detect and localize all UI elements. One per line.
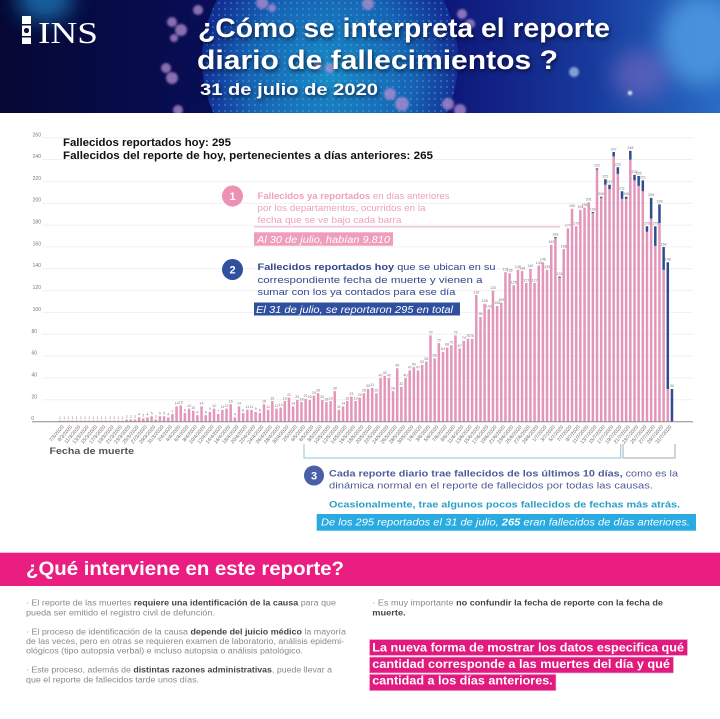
bars: fallecidos ya reportados (60, 156, 668, 422)
x axis date labels: 31/3/2020 (147, 424, 166, 445)
bar value labels: 40 (379, 373, 383, 377)
x axis date labels: 23/6/2020 (496, 424, 515, 445)
title: 31 de julio de 2020 (200, 80, 378, 99)
bar value labels: 116 (473, 290, 479, 294)
x axis date labels: 8/4/2020 (182, 424, 199, 443)
x axis date labels: 5/7/2020 (548, 424, 565, 443)
bar value labels: 136 (507, 268, 513, 272)
bar value labels: 23 (349, 392, 353, 396)
bar value labels: 6 (205, 410, 207, 414)
x axis date labels: 18/5/2020 (346, 424, 365, 445)
x axis date labels: 25/7/2020 (629, 424, 648, 445)
bar value labels: 177 (565, 224, 571, 228)
bar value labels: 205 (648, 193, 654, 197)
summary text (63, 137, 433, 162)
bar value labels: 222 (602, 175, 608, 179)
x axis date labels: 19/3/2020 (97, 424, 116, 445)
bar value labels: 1 (92, 416, 94, 420)
y axis labels: 0 (31, 416, 34, 422)
highlighted conclusion: La nueva forma de mostrar los datos especifica qué (372, 642, 684, 654)
bar value labels: 1 (109, 416, 111, 420)
bar value labels (59, 146, 674, 420)
title: diario de fallecimientos ? (197, 45, 558, 75)
bar value labels: 47 (408, 366, 412, 370)
left explanatory text: · El reporte de las muertes requiere una identificación de la causa para que (26, 599, 337, 608)
logo: INS (38, 15, 98, 50)
x axis date labels: 15/7/2020 (588, 424, 607, 445)
bar value labels: 12 (274, 404, 278, 408)
x axis date labels: 13/3/2020 (72, 424, 91, 445)
left explanatory text: · Este proceso, además de distintas razones administrativas , puede llevar a (26, 666, 333, 675)
x axis date labels: 7/3/2020 (48, 424, 66, 443)
x axis date labels: 27/3/2020 (130, 424, 149, 445)
bar value labels: 14 (341, 402, 345, 406)
bar value labels: 14 (200, 402, 204, 406)
bar value labels: 109 (498, 298, 504, 302)
bar value labels: 133 (557, 272, 563, 276)
bar value labels: 96 (478, 312, 482, 316)
bar value labels: 26 (316, 389, 320, 393)
bar value labels: 74 (462, 336, 466, 340)
bar value labels: 14 (291, 402, 295, 406)
bar value labels: 179 (652, 222, 658, 226)
x axis date labels: 18/4/2020 (221, 424, 241, 445)
bar value labels: 20 (320, 395, 324, 399)
x axis date labels: 29/3/2020 (138, 424, 157, 445)
y axis labels: 120 (33, 285, 41, 291)
bar value labels: 19 (329, 396, 333, 400)
bar value labels: 58 (433, 354, 437, 358)
bar value labels: 139 (544, 265, 550, 269)
bar value labels: 16 (262, 400, 266, 404)
callout 2: reportados hoy: Fallecidos reportados hoy que se ubican en su (258, 262, 496, 273)
bar value labels: 11 (250, 405, 253, 409)
bar value labels: 179 (644, 222, 650, 226)
highlighted conclusion (370, 640, 688, 691)
bar value labels: 11 (337, 405, 341, 409)
x axis date labels: 1/6/2020 (406, 424, 424, 443)
bar value labels: 31 (370, 383, 374, 387)
summary text: Fallecidos del reporte de hoy, pertenecientes a días anteriores: 265 (63, 150, 433, 162)
bar value labels: 7 (171, 409, 173, 413)
bar value labels: 146 (665, 258, 671, 262)
bracket: días recientes (623, 444, 675, 458)
bar value labels: 20 (295, 395, 299, 399)
bar value labels: 5 (151, 412, 153, 416)
x axis date labels: 26/5/2020 (380, 424, 399, 445)
bar value labels: 76 (466, 334, 470, 338)
bar value labels: 2 (155, 415, 157, 419)
x axis date labels: 28/5/2020 (388, 424, 407, 445)
bar value labels: 1 (71, 416, 73, 420)
bar value labels: 14 (237, 402, 241, 406)
callout 2: reportados hoy: correspondiente fecha de muerte y vienen a (258, 275, 483, 286)
x axis date labels: 11/7/2020 (571, 424, 590, 445)
bar value labels: 201 (586, 198, 592, 202)
bar value labels: 12 (225, 404, 229, 408)
x axis date labels: 28/4/2020 (263, 424, 282, 445)
bar value labels: 1 (121, 416, 123, 420)
x axis date labels: 9/6/2020 (440, 424, 457, 443)
y axis labels: 220 (33, 176, 41, 182)
callout 3: dinámica del reporte: De los 295 reportados el 31 de julio, 265 eran fallecidos de días anteriores. (321, 518, 690, 529)
bar value labels: 52 (420, 360, 424, 364)
bar value labels: 225 (636, 171, 642, 175)
x axis date labels: 6/5/2020 (298, 424, 315, 443)
bar value labels: 68 (445, 343, 449, 347)
bar value labels: 12 (187, 404, 191, 408)
x axis date labels: 20/4/2020 (230, 424, 249, 445)
bar value labels: 192 (590, 207, 596, 211)
bar value labels: 1 (80, 416, 82, 420)
bar value labels: 19 (283, 396, 287, 400)
bar value labels: 8 (259, 408, 261, 412)
bar value labels: 24 (312, 391, 316, 395)
x axis date labels: 21/3/2020 (105, 424, 124, 445)
bar value labels: 28 (333, 386, 337, 390)
bar value labels: 30 (366, 384, 370, 388)
bar value labels: 199 (656, 200, 662, 204)
bar value labels: 211 (619, 187, 625, 191)
bar value labels: 2 (130, 415, 132, 419)
bar value labels: 1 (76, 416, 78, 420)
x axis date labels: 10/5/2020 (313, 424, 332, 445)
title: ¿Cómo se interpreta el reporte (198, 13, 610, 43)
right explanatory text: · Es muy importante no confundir la fecha de reporte con la fecha de (372, 599, 664, 608)
x axis date labels: 13/7/2020 (579, 424, 599, 445)
x axis date labels: 14/4/2020 (205, 424, 224, 445)
callout 2: reportados hoy (222, 259, 496, 316)
bar value labels: 232 (594, 164, 600, 168)
bar value labels: 1 (84, 416, 86, 420)
bar value labels: 79 (453, 331, 457, 335)
x axis date labels: 19/7/2020 (604, 424, 624, 445)
highlighted conclusion: cantidad a los días anteriores. (372, 676, 553, 688)
bar value labels: 7 (217, 409, 219, 413)
x axis date labels: 30/4/2020 (271, 424, 290, 445)
bar value labels: 1 (88, 416, 90, 420)
bar value labels: 4 (146, 413, 148, 417)
bar value labels: 5 (163, 412, 165, 416)
bar value labels: 146 (540, 258, 546, 262)
x axis date labels: 20/5/2020 (355, 424, 374, 445)
bar value labels: 18 (324, 397, 328, 401)
bar value labels: 1 (67, 416, 69, 420)
callout 1: ya reportados: fecha que se ve bajo cada barra (258, 215, 402, 226)
bar value labels: 195 (569, 204, 575, 208)
bar value labels: 108 (482, 299, 488, 303)
x axis date labels: 17/3/2020 (88, 424, 107, 445)
bar value labels: 158 (561, 244, 567, 248)
x axis date labels: 4/4/2020 (165, 424, 182, 443)
x axis date labels: 29/6/2020 (521, 424, 540, 445)
x axis date labels: 13/6/2020 (455, 424, 474, 445)
x axis date labels: 7/7/2020 (556, 424, 574, 443)
y axis labels: 200 (33, 198, 41, 204)
left explanatory text (26, 599, 347, 684)
y axis labels: 40 (31, 372, 37, 378)
bar value labels: 47 (416, 366, 420, 370)
x axis date labels: 25/6/2020 (505, 424, 524, 445)
bar value labels: 160 (661, 242, 667, 246)
callout 3: dinámica del reporte: Ocasionalmente, trae algunos pocos fallecidos de fechas más atrás. (329, 499, 680, 510)
x axis date labels: 16/4/2020 (213, 424, 232, 445)
callout 1: ya reportados: Fallecidos ya reportados en días anteriores (258, 191, 450, 202)
bar value labels: 221 (640, 176, 646, 180)
bar value labels: 21 (304, 394, 308, 398)
bar value labels: 233 (615, 163, 621, 167)
bar value labels: 5 (159, 412, 161, 416)
x axis date labels: 2/5/2020 (282, 424, 299, 443)
bar value labels: 70 (449, 341, 453, 345)
bar value labels: 14 (175, 402, 179, 406)
x axis date labels: 25/3/2020 (122, 424, 141, 445)
callout 3: dinámica del reporte: dinámica normal en el reporte de fallecidos por todas las causas. (329, 480, 653, 491)
x axis date labels: 9/3/2020 (57, 424, 74, 443)
x axis date labels: 12/4/2020 (197, 424, 216, 445)
bar value labels: 194 (577, 205, 583, 209)
bar value labels: 55 (424, 357, 428, 361)
x axis date labels: 24/5/2020 (371, 424, 390, 445)
left explanatory text: ológicos (tipo autopsia verbal) e incluso autopsia o análisis patológico. (26, 647, 303, 656)
bar value labels: 247 (611, 147, 617, 151)
x axis date labels: 11/3/2020 (64, 424, 82, 445)
bar value labels: 143 (536, 261, 542, 265)
bar value labels: 120 (490, 286, 496, 290)
left explanatory text: · El proceso de identificación de la causa depende del juicio médico la mayoría (26, 627, 347, 636)
bars: fallecidos reportados hoy (555, 151, 672, 422)
x axis date labels: 9/7/2020 (565, 424, 582, 443)
bar value labels: 140 (527, 264, 533, 268)
bar value labels: 103 (486, 305, 492, 309)
bar value labels: 4 (167, 413, 169, 417)
bar value labels: 2 (126, 415, 128, 419)
y axis labels: 180 (33, 220, 41, 226)
bar value labels: 138 (519, 266, 525, 270)
x axis date labels: 27/7/2020 (638, 424, 657, 445)
x axis date labels: 30/5/2020 (396, 424, 415, 445)
bar value labels: 19 (345, 396, 349, 400)
callout 3: dinámica del reporte (304, 466, 696, 531)
x axis date labels: 29/7/2020 (646, 424, 665, 445)
bar value labels: 162 (548, 240, 554, 244)
x axis date labels: 14/5/2020 (330, 424, 349, 445)
x axis date labels (48, 424, 673, 445)
bar value labels: 11 (220, 405, 224, 409)
bar value labels: 1 (105, 416, 107, 420)
x axis date labels: 4/5/2020 (290, 424, 307, 443)
x axis date labels: 6/4/2020 (173, 424, 191, 443)
bar value labels: 1 (117, 416, 119, 420)
bar value labels: 11 (266, 405, 270, 409)
bar value labels: 4 (234, 413, 236, 417)
section band: ¿Qué interviene en este reporte?: ¿Qué interviene en este reporte? (26, 558, 344, 580)
callout 2: reportados hoy: El 31 de julio, se reportaron 295 en total (256, 305, 454, 316)
x axis date labels: 15/6/2020 (463, 424, 482, 445)
bar value labels: 19 (354, 396, 358, 400)
right explanatory text (372, 599, 664, 617)
bar value labels: 49 (395, 363, 399, 367)
bar value labels: 217 (607, 180, 613, 184)
x axis date labels: 2/4/2020 (157, 424, 174, 443)
x axis date labels: 23/3/2020 (113, 424, 132, 445)
bar value labels: 9 (255, 407, 257, 411)
bar value labels: 12 (212, 404, 216, 408)
callout 1: ya reportados: por los departamentos, ocurridos en la (258, 203, 426, 214)
bar value labels: 15 (179, 401, 183, 405)
left explanatory text: de las veces, pero en otras se requieren examen de laboratorio, análisis epidemi- (26, 637, 344, 646)
bar value labels: 169 (552, 232, 558, 236)
callout 2: reportados hoy: sumar con los ya contados para ese día (258, 287, 456, 298)
callout 3: dinámica del reporte: 3 (311, 470, 317, 482)
bar value labels: 18 (299, 397, 303, 401)
bar value labels: 9 (209, 407, 211, 411)
bar value labels: 72 (437, 338, 441, 342)
bar value labels: 137 (502, 267, 508, 271)
x axis date labels: 16/5/2020 (338, 424, 357, 445)
y axis labels: 260 (33, 132, 41, 138)
x axis date labels: 3/6/2020 (415, 424, 432, 443)
bracket: últimos 10 días (304, 444, 621, 458)
y axis labels: 20 (31, 394, 37, 400)
bar chart: fallecidos por fecha de muerte (31, 132, 693, 457)
x axis date labels: 5/6/2020 (423, 424, 440, 443)
bar value labels: 22 (287, 393, 291, 397)
bar value labels: 13 (279, 403, 283, 407)
x axis date labels: 8/5/2020 (307, 424, 324, 443)
x axis date labels: 7/6/2020 (431, 424, 449, 443)
bar value labels: 206 (598, 192, 604, 196)
x axis date labels: 1/7/2020 (531, 424, 549, 443)
bar value labels: 20 (308, 395, 312, 399)
title (197, 13, 610, 99)
x axis date labels: 3/7/2020 (540, 424, 557, 443)
bar value labels: 26 (374, 389, 378, 393)
bar value labels: 4 (138, 413, 140, 417)
bar value labels: 11 (245, 405, 249, 409)
bar value labels: 16 (229, 400, 233, 404)
y axis labels: 140 (33, 263, 41, 269)
x axis date labels: 26/4/2020 (255, 424, 274, 445)
bar value labels: 8 (184, 408, 186, 412)
bar value labels: 64 (441, 347, 445, 351)
bar value labels: 22 (358, 393, 362, 397)
x axis date labels: 11/6/2020 (447, 424, 465, 445)
x axis date labels: 21/7/2020 (613, 424, 632, 445)
x axis date labels: 15/3/2020 (80, 424, 99, 445)
axis line (32, 421, 693, 423)
header banner (0, 0, 720, 113)
bar value labels: 8 (242, 408, 244, 412)
bar value labels: 1 (63, 416, 65, 420)
bar value labels: 179 (573, 222, 579, 226)
callout 3: dinámica del reporte: Cada reporte diario trae fallecidos de los últimos 10 días, como es la (329, 469, 679, 480)
y axis labels: 160 (33, 242, 41, 248)
x axis date labels: 17/7/2020 (596, 424, 615, 445)
section band: ¿Qué interviene en este reporte? (0, 553, 720, 586)
bar value labels: 1 (113, 416, 115, 420)
bar value labels: 127 (532, 278, 538, 282)
bar value labels: 1 (96, 416, 98, 420)
y axis labels (31, 132, 41, 422)
bar value labels: 196 (582, 203, 588, 207)
bar value labels: 26 (362, 389, 366, 393)
x axis date labels: 22/5/2020 (363, 424, 382, 445)
bar value labels: 248 (627, 146, 633, 150)
bar value labels: 3 (142, 414, 144, 418)
x axis date labels: 10/4/2020 (188, 424, 207, 445)
bar value labels: 1 (59, 416, 61, 420)
bar value labels: 79 (429, 331, 433, 335)
logo (22, 16, 96, 44)
x axis date labels: 22/4/2020 (238, 424, 257, 445)
x axis date labels: 31/7/2020 (654, 424, 673, 445)
bar value labels: 32 (399, 382, 403, 386)
bar value labels: 2 (134, 415, 136, 419)
callout 1: ya reportados: Al 30 de julio, habían 9.810 (256, 235, 390, 246)
bar value labels: 28 (391, 386, 395, 390)
y axis labels: 80 (31, 329, 37, 335)
x axis date labels: 12/5/2020 (321, 424, 340, 445)
bar value labels: 67 (458, 344, 462, 348)
bar value labels: 76 (470, 334, 474, 338)
bar value labels: 226 (631, 170, 637, 174)
bar value labels: 50 (412, 362, 416, 366)
left explanatory text: pueda ser emitido el registro civil de defunción. (26, 608, 215, 617)
bar value labels: 6 (196, 410, 198, 414)
right explanatory text: muerte. (372, 608, 406, 617)
bar value labels: 10 (191, 406, 195, 410)
bar value labels: 206 (623, 192, 629, 196)
bar value labels: 30 (670, 384, 674, 388)
summary text: Fallecidos reportados hoy: 295 (63, 137, 231, 149)
x axis date labels: 21/6/2020 (488, 424, 507, 445)
bar value labels: 139 (515, 265, 521, 269)
highlighted conclusion: cantidad corresponde a las muertes del día y qué (372, 659, 670, 671)
bar value labels: 1 (101, 416, 103, 420)
bar value labels: 106 (494, 301, 500, 305)
bar value labels: 40 (387, 373, 391, 377)
y axis labels: 60 (31, 350, 37, 356)
x axis date labels: 23/7/2020 (621, 424, 640, 445)
bar value labels: 127 (523, 278, 529, 282)
x axis date labels: 19/6/2020 (480, 424, 499, 445)
callout 1: ya reportados (222, 186, 560, 246)
bar value labels: 42 (383, 371, 387, 375)
x axis date labels: 24/4/2020 (246, 424, 265, 445)
x axis date labels: 27/6/2020 (513, 424, 532, 445)
y axis labels: 240 (33, 154, 41, 160)
callout 1: ya reportados: 1 (229, 191, 236, 203)
x axis date labels: 17/6/2020 (471, 424, 490, 445)
left explanatory text: que el reporte de fallecidos tarde unos días. (26, 675, 199, 684)
bar value labels: 125 (511, 280, 517, 284)
bar value labels: 40 (404, 373, 408, 377)
x axis title: Fecha de muerte (50, 446, 134, 457)
bar value labels: 19 (270, 396, 274, 400)
callout 2: reportados hoy: 2 (229, 264, 236, 276)
y axis labels: 100 (33, 307, 41, 313)
